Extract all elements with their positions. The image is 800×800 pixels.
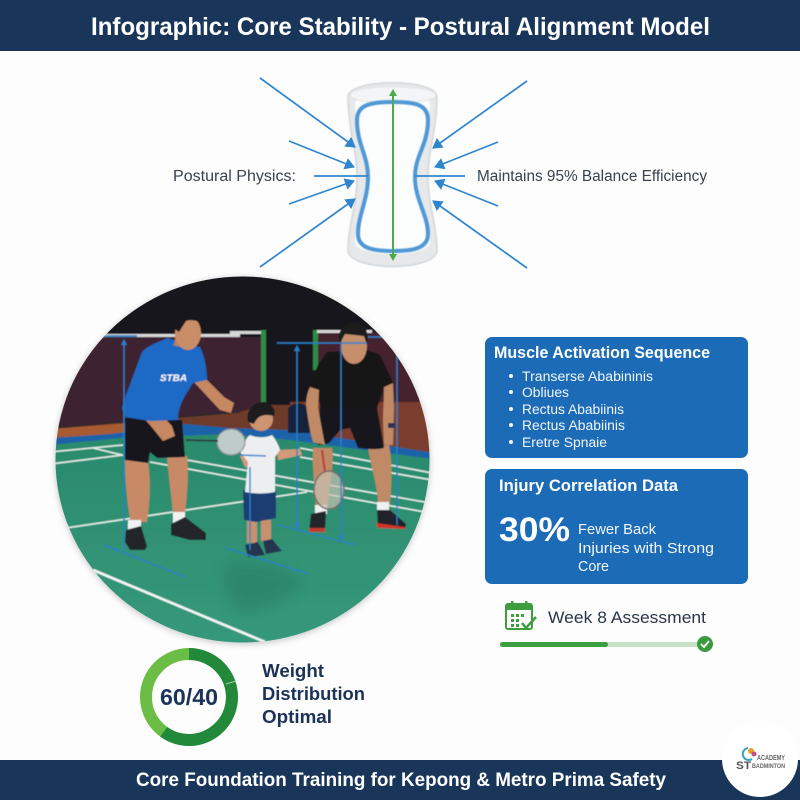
logo mark xyxy=(743,748,756,760)
stat description: Fewer Back xyxy=(578,522,657,538)
inner blue muscle outline xyxy=(357,102,428,251)
stat description: Injuries with Strong xyxy=(578,541,714,557)
progress bar xyxy=(500,636,713,652)
child shadow on floor xyxy=(226,566,296,610)
man in blue shirt xyxy=(122,307,234,550)
stat description: Core xyxy=(578,559,609,575)
court lines xyxy=(50,445,432,528)
circular photo: badminton coaching scene xyxy=(50,270,440,650)
child with racket xyxy=(186,403,302,557)
logo badge xyxy=(722,721,798,797)
back wall right xyxy=(316,332,420,402)
label: postural physics: Postural Physics: xyxy=(173,168,296,185)
big stat: 30% xyxy=(499,511,570,549)
muscle list xyxy=(509,369,653,450)
donut chart: weight distribution: 60/40 xyxy=(160,684,218,710)
week 8 assessment label: Week 8 Assessment xyxy=(548,608,706,627)
muscle list: Transerse Ababininis xyxy=(522,369,653,384)
header banner xyxy=(0,0,800,51)
green alignment arrow xyxy=(389,89,397,261)
blue border xyxy=(50,424,440,462)
muscle list: Rectus Ababiinis xyxy=(522,402,624,417)
icon: calendar check xyxy=(506,601,536,629)
panel: injury correlation data xyxy=(485,469,748,584)
logo badge: BADMINTON xyxy=(752,763,785,770)
panel heading: Injury Correlation Data xyxy=(499,476,679,495)
logo badge: ST xyxy=(736,760,751,772)
core cylinder diagram xyxy=(260,78,527,268)
title: Infographic: Core Stability - Postural Alignment Model xyxy=(91,13,710,41)
label: balance efficiency: Maintains 95% Balance Efficiency xyxy=(477,168,707,185)
stat description xyxy=(578,522,714,575)
dark equipment bag xyxy=(288,403,310,433)
brown floor xyxy=(50,405,290,430)
footer text: Core Foundation Training for Kepong & Metro Prima Safety xyxy=(136,769,666,791)
green floor xyxy=(50,434,440,650)
weight distribution label: Distribution xyxy=(262,684,365,704)
weight distribution label: Optimal xyxy=(262,707,332,727)
glass core body xyxy=(348,83,437,266)
man in black shirt xyxy=(306,323,406,532)
muscle list: Rectus Ababiinis xyxy=(522,418,625,433)
footer banner xyxy=(0,760,800,800)
compression arrows xyxy=(260,78,527,268)
logo badge: ACADEMY xyxy=(757,755,785,762)
muscle list: Obliues xyxy=(522,385,569,400)
panel heading: Muscle Activation Sequence xyxy=(494,343,710,362)
donut chart: weight distribution xyxy=(146,654,236,740)
weight distribution label: Weight xyxy=(262,661,324,681)
man in blue shirt: STBA xyxy=(160,373,187,384)
back wall left xyxy=(50,337,262,428)
panel: muscle activation sequence xyxy=(485,337,748,458)
muscle list: Eretre Spnaie xyxy=(522,435,607,450)
blue alignment overlay lines xyxy=(102,336,407,577)
weight distribution label xyxy=(262,661,365,727)
